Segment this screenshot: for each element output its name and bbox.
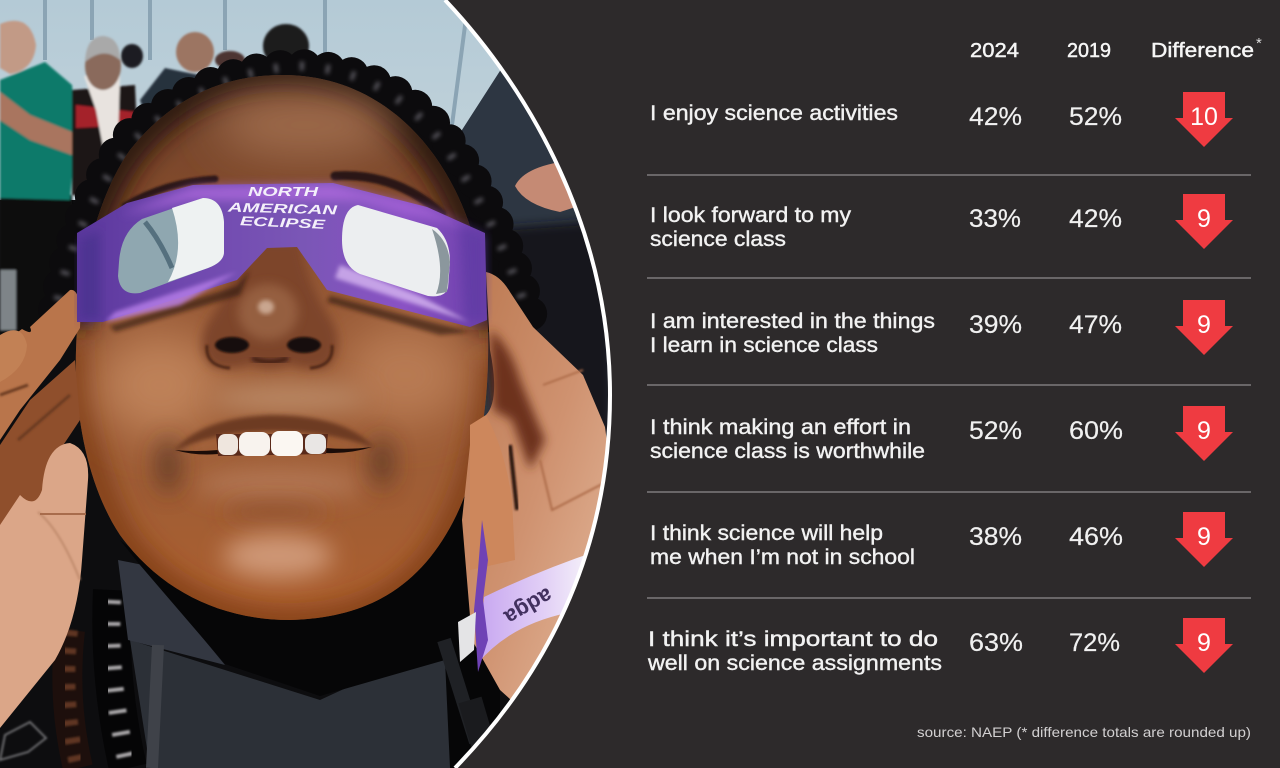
- row: I am interested in the things I learn in science class: 39%: [969, 311, 1022, 339]
- eclipse glasses: [77, 183, 487, 327]
- arrow: down 9: [1175, 300, 1233, 355]
- left hand: [0, 290, 88, 760]
- row: I think making an effort in science class is worthwhile: 52%: [969, 417, 1022, 445]
- wristband: [458, 520, 584, 672]
- row: I think it's important to do well on science assignments: I think it’s important to do: [648, 628, 938, 651]
- row: I enjoy science activities: 52%: [1069, 103, 1122, 131]
- row: I enjoy science activities: 42%: [969, 103, 1022, 131]
- glasses lettering: AMERICAN: [226, 200, 338, 217]
- table header: 2019: [1067, 40, 1111, 62]
- row: I am interested in the things I learn in science class: I learn in science class: [650, 334, 878, 357]
- row: I think it's important to do well on science assignments: well on science assignments: [647, 652, 942, 675]
- hoodie: [118, 542, 490, 768]
- table header: Difference: [1151, 40, 1254, 62]
- row: I look forward to my science class: [650, 194, 1233, 251]
- row: I think science will help me when I'm not in school: 46%: [1069, 523, 1123, 551]
- arrow: down 10: [1175, 92, 1233, 147]
- arrow: down 10: 10: [1190, 103, 1218, 131]
- glasses lettering: ECLIPSE: [240, 213, 326, 232]
- arrow: down 9: 9: [1197, 629, 1211, 657]
- row: I enjoy science activities: [650, 92, 1233, 147]
- arrow: down 9: 9: [1197, 311, 1211, 339]
- wristband: adga: [500, 583, 557, 631]
- left lens: [118, 198, 224, 293]
- table header: 2024: [970, 40, 1019, 62]
- smile: [173, 415, 375, 456]
- row: I think making an effort in science class is worthwhile: science class is worthwhile: [650, 440, 925, 463]
- row: I am interested in the things I learn in science class: I am interested in the things: [650, 310, 935, 333]
- row: I am interested in the things I learn in science class: [650, 300, 1233, 357]
- right hand: [462, 272, 612, 708]
- row: I look forward to my science class: 42%: [1069, 205, 1122, 233]
- right lens: [342, 205, 450, 296]
- row: I think it's important to do well on science assignments: 72%: [1069, 629, 1120, 657]
- row: I think making an effort in science class is worthwhile: I think making an effort in: [650, 416, 911, 439]
- row: I think science will help me when I'm not in school: 38%: [969, 523, 1022, 551]
- arrow: down 9: 9: [1197, 523, 1211, 551]
- row: I look forward to my science class: I look forward to my: [650, 204, 852, 227]
- nose: [202, 240, 338, 369]
- row: I am interested in the things I learn in science class: 47%: [1069, 311, 1122, 339]
- photo: girl wearing eclipse glasses: [0, 0, 612, 768]
- shadow under glasses: [110, 270, 470, 335]
- row: I think it's important to do well on science assignments: 63%: [969, 629, 1023, 657]
- arrow: down 9: 9: [1197, 417, 1211, 445]
- glasses lettering: [228, 187, 338, 229]
- arrow: down 9: [1175, 512, 1233, 567]
- sky and glass railing: [0, 0, 510, 768]
- row: I think making an effort in science class is worthwhile: [650, 406, 1233, 463]
- arrow: down 9: 9: [1197, 205, 1211, 233]
- glasses lettering: NORTH: [248, 184, 319, 199]
- row: I look forward to my science class: science class: [650, 228, 786, 251]
- table header: *: [1256, 35, 1262, 52]
- arrow: down 9: [1175, 194, 1233, 249]
- row: I look forward to my science class: 33%: [969, 205, 1021, 233]
- person in black at right: [460, 60, 612, 440]
- hair and braids: [55, 66, 532, 768]
- row: I think science will help me when I'm not in school: me when I’m not in school: [650, 546, 915, 569]
- row: I think science will help me when I'm not in school: I think science will help: [650, 522, 883, 545]
- row: I think science will help me when I'm not in school: [650, 512, 1233, 569]
- white oval photo border: [445, 0, 610, 768]
- row: I think it's important to do well on science assignments: [647, 618, 1233, 675]
- eyebrows: [125, 176, 442, 214]
- arrow: down 9: [1175, 406, 1233, 461]
- table header: [970, 35, 1262, 62]
- row: I enjoy science activities: I enjoy science activities: [650, 102, 898, 125]
- crowd behind: [0, 21, 309, 335]
- source note: source: NAEP (* difference totals are rounded up): [917, 724, 1251, 740]
- row: I think making an effort in science class is worthwhile: 60%: [1069, 417, 1123, 445]
- arrow: down 9: [1175, 618, 1233, 673]
- face: [70, 70, 495, 625]
